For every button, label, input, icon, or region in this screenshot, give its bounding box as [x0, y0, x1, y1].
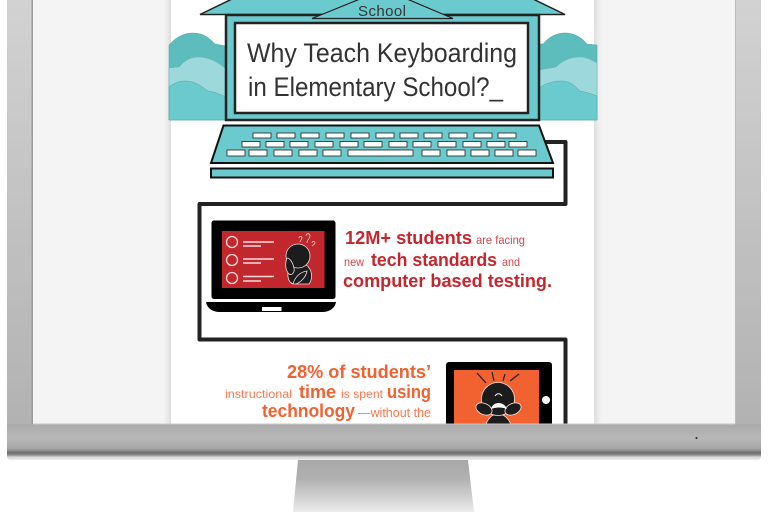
- checklist: [226, 236, 274, 284]
- gable with school label: School: [358, 3, 406, 20]
- title screen: Why Teach Keyboarding: [247, 38, 517, 68]
- orange statistic text: time: [299, 382, 336, 402]
- title screen: [235, 23, 528, 113]
- red statistic text: computer based testing.: [343, 271, 552, 291]
- clouds: right: [539, 33, 597, 120]
- connector path: [200, 142, 566, 430]
- surprised student: [474, 372, 523, 432]
- red statistic text: new: [344, 255, 364, 269]
- red statistic text: 12M+ students: [345, 228, 472, 248]
- red statistic text: tech standards: [371, 250, 497, 270]
- orange statistic text: instructional: [225, 387, 292, 401]
- orange statistic text: —without the: [358, 405, 431, 420]
- confused student: [286, 234, 315, 284]
- orange statistic text: is spent: [341, 387, 384, 401]
- gable with school label: [312, 0, 453, 20]
- red statistic text: and: [502, 255, 520, 269]
- page shadow: [164, 0, 601, 424]
- orange statistic text: [225, 362, 431, 421]
- camera dot: [696, 437, 698, 439]
- school building body: [226, 15, 539, 120]
- white infographic page: [171, 0, 594, 424]
- laptop icon: [206, 220, 336, 312]
- orange statistic text: technology: [262, 401, 355, 421]
- orange statistic text: 28% of students’: [287, 362, 431, 382]
- orange statistic text: using: [387, 382, 431, 402]
- clouds: left: [169, 33, 226, 120]
- monitor stand: [293, 460, 474, 512]
- keyboard: [211, 126, 553, 163]
- tablet icon: [446, 362, 552, 442]
- title screen: in Elementary School?_: [248, 72, 504, 102]
- monitor screen background: [33, 0, 735, 424]
- red statistic text: are facing: [476, 233, 525, 247]
- keyboard front bar: [211, 168, 553, 178]
- red statistic text: [343, 228, 552, 291]
- school building roof: [200, 0, 565, 14]
